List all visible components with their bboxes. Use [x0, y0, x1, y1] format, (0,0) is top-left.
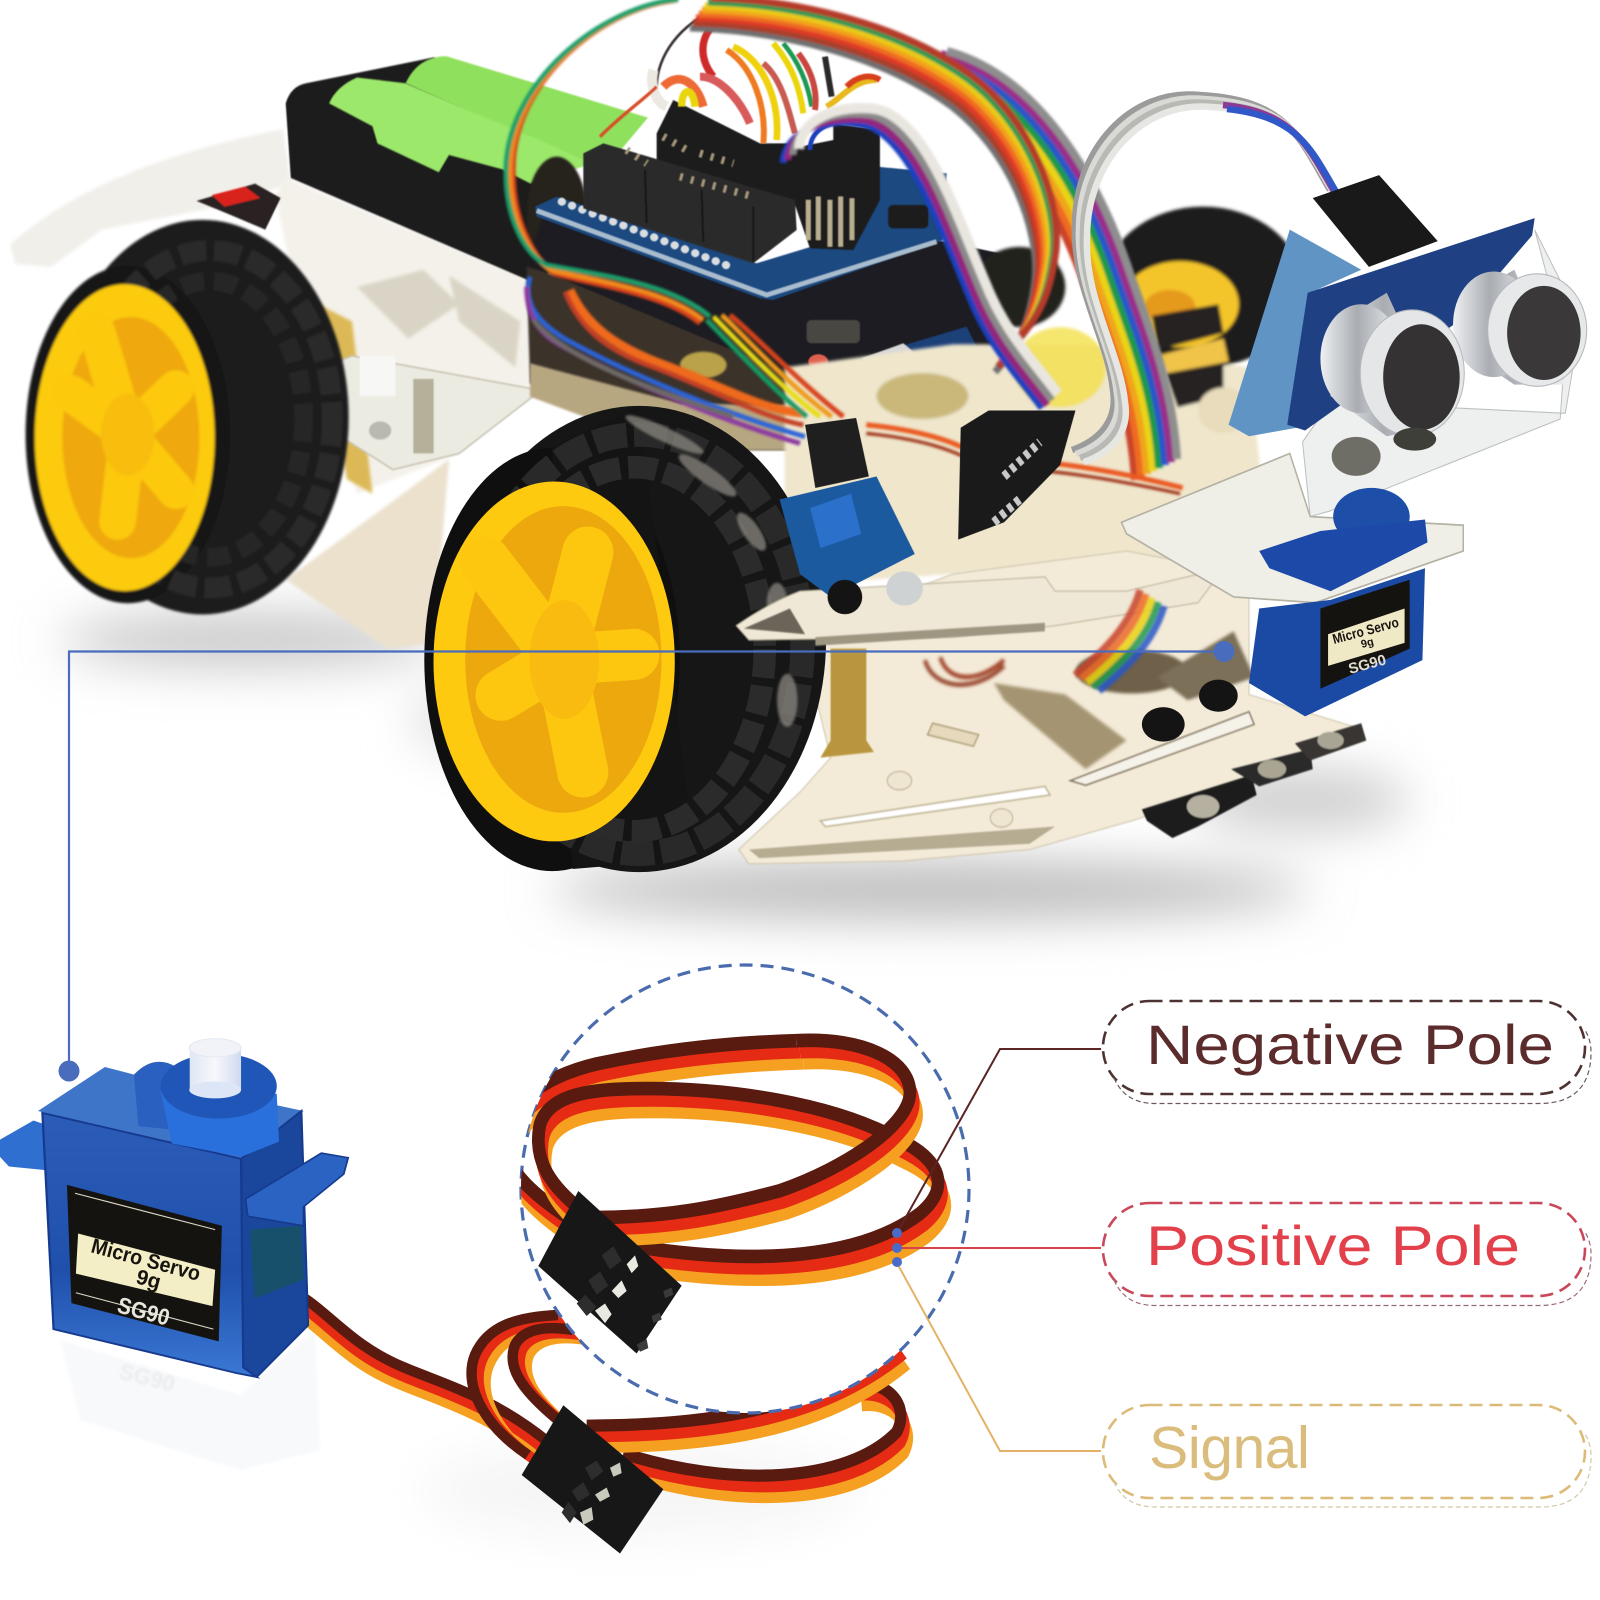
rear body shading: [357, 270, 520, 367]
rear wheel: [26, 220, 349, 614]
black bolts: [1142, 680, 1238, 742]
right lower strands: [587, 1343, 907, 1497]
acrylic rear body: [276, 178, 533, 494]
right mounting ear: [246, 1153, 348, 1226]
sensor ribbon: [1072, 94, 1342, 462]
servo label text: [89, 1235, 203, 1331]
label: negative pole: [897, 1001, 1591, 1233]
card pads: [994, 442, 1040, 522]
large servo reflection: [60, 1330, 320, 1470]
motor dark parts: [1152, 304, 1223, 350]
yellow wheel: [1104, 207, 1303, 367]
cream chassis backdrop: [785, 344, 1269, 585]
white shaft: [189, 1039, 241, 1098]
ultrasonic sensor: [1229, 175, 1587, 517]
left transducer: [1320, 293, 1464, 436]
arduino board: [530, 217, 1000, 397]
label: signal: [897, 1263, 1591, 1507]
signal text: Signal: [1149, 1415, 1310, 1481]
servo label back: [1320, 580, 1410, 689]
right side wheel and background parts: [785, 207, 1303, 585]
second strand: [538, 1089, 945, 1279]
servo label text: 9g: [134, 1266, 163, 1294]
ir obstacle sensor: [780, 410, 1076, 614]
under board cavity: [527, 267, 1000, 450]
positive leader: [897, 1247, 1101, 1249]
rear ribbon: [905, 51, 1177, 480]
sensor bolts: [1332, 437, 1381, 476]
top plate of front chassis: [736, 568, 1223, 646]
ir black led: [828, 580, 862, 614]
power switch: [196, 184, 281, 230]
lower connector: [522, 1405, 663, 1554]
line sensor modules: [1142, 723, 1366, 838]
zoom circle: [521, 965, 969, 1413]
negative leader: [897, 1049, 1101, 1233]
sensor board: [1287, 218, 1535, 430]
acrylic mount: [1121, 453, 1463, 603]
outer loop: [472, 1315, 572, 1465]
small servo text: Micro Servo: [1331, 614, 1400, 647]
ground shadows: [60, 612, 1410, 920]
servo side face: [241, 1111, 308, 1377]
signal pill shadow: [1114, 1434, 1591, 1507]
shield edge: [537, 211, 937, 295]
shaft housing small: [134, 1062, 179, 1130]
servo cable: [277, 1287, 548, 1458]
servo front face: [42, 1113, 257, 1377]
servo top: [1259, 519, 1428, 591]
rear chassis and battery: [10, 56, 648, 649]
magnified connector: [538, 1191, 682, 1354]
small servo text: 9g: [1360, 636, 1375, 651]
acrylic under board: [530, 363, 1000, 450]
sensor connectors: [583, 100, 880, 263]
front rim: [433, 482, 675, 841]
button: [888, 205, 928, 228]
potentiometer: [810, 494, 861, 548]
front chassis plates: [739, 551, 1366, 864]
servo label: [67, 1185, 222, 1341]
rear white plate: [10, 129, 291, 267]
cable reflection: [420, 1440, 860, 1540]
negative pill: [1103, 1001, 1585, 1094]
shaft housing top: [161, 1054, 277, 1119]
ir clear led: [886, 571, 923, 606]
white grey ribbon: [783, 108, 1058, 408]
tire dirt: [623, 410, 797, 727]
large servo reflection: SG90: [117, 1359, 177, 1396]
ir board: [780, 476, 915, 597]
header dots: [562, 202, 730, 267]
far left strand: [503, 1041, 803, 1243]
robot car photo: [10, 0, 1587, 872]
label: positive pole: [897, 1203, 1591, 1306]
orange and blue wires: [527, 277, 843, 443]
first strand: [593, 1040, 917, 1240]
small servo text: [1331, 614, 1400, 678]
sensor connector: [1313, 175, 1438, 267]
bottom plate: [739, 551, 1361, 864]
shield pcb: [535, 167, 947, 300]
left mounting ear: [0, 1121, 47, 1170]
battery back: [406, 56, 648, 172]
negative pill shadow: [1114, 1030, 1591, 1104]
small servo text: SG90: [1347, 652, 1388, 678]
left green loop: [506, 0, 710, 323]
arduino and shield: [527, 10, 1000, 450]
wire to card sensor: [866, 425, 1183, 494]
right transducer: [1453, 270, 1587, 386]
dark battery end: [527, 157, 587, 270]
servo label text: SG90: [115, 1292, 173, 1331]
servo head: [1333, 488, 1410, 545]
signal leader: [897, 1263, 1101, 1451]
lower see-through wires: [925, 631, 1254, 769]
inner loop: [513, 1328, 587, 1430]
positive text: Positive Pole: [1146, 1214, 1520, 1277]
front wheel: [424, 406, 826, 872]
callout dot car: [1214, 641, 1234, 662]
lower cable loops: [472, 1315, 907, 1554]
usb and parts: [787, 320, 980, 397]
callout line to servo: [58, 641, 1234, 1082]
rear rim: [35, 284, 215, 591]
plate reflection: [815, 623, 1045, 646]
signal pill: [1103, 1405, 1585, 1498]
main rainbow ribbons: [506, 0, 1183, 691]
sensor bracket: [1303, 230, 1581, 517]
callout dot servo: [58, 1060, 80, 1082]
small servo on car: [1121, 453, 1463, 716]
wire pole dots: [892, 1228, 902, 1267]
dark blob behind ribbon: [973, 247, 1065, 327]
magnified cable: [503, 1040, 945, 1354]
positive pill shadow: [1114, 1232, 1591, 1306]
servo body: [1249, 568, 1425, 716]
servo label band: [1328, 608, 1405, 666]
yellow blob: [680, 352, 727, 378]
plate details: [749, 712, 1254, 858]
top ribbon: [690, 0, 1057, 372]
battery front: [329, 77, 592, 184]
front tire: [424, 406, 826, 872]
small acrylic plate: [268, 356, 541, 470]
brass standoff: [820, 649, 874, 758]
black card sensor: [958, 410, 1076, 540]
rear board: [1229, 230, 1361, 436]
rear tire: [26, 220, 349, 614]
side glass highlight: [250, 1226, 304, 1299]
top wire tangle: [600, 10, 880, 150]
negative text: Negative Pole: [1146, 1013, 1554, 1076]
shaft housing: [161, 1092, 279, 1157]
lower rear plate: [286, 459, 449, 649]
see-through ribbon below plate: [1075, 590, 1164, 691]
servo top face: [38, 1067, 304, 1161]
ir connector: [805, 418, 869, 488]
servo label text: Micro Servo: [89, 1235, 203, 1286]
top plate: [736, 568, 1223, 640]
battery holder: [286, 57, 577, 281]
yellow motor: [296, 293, 372, 494]
positive pill: [1103, 1203, 1585, 1296]
large sg90 servo: [0, 1039, 348, 1377]
